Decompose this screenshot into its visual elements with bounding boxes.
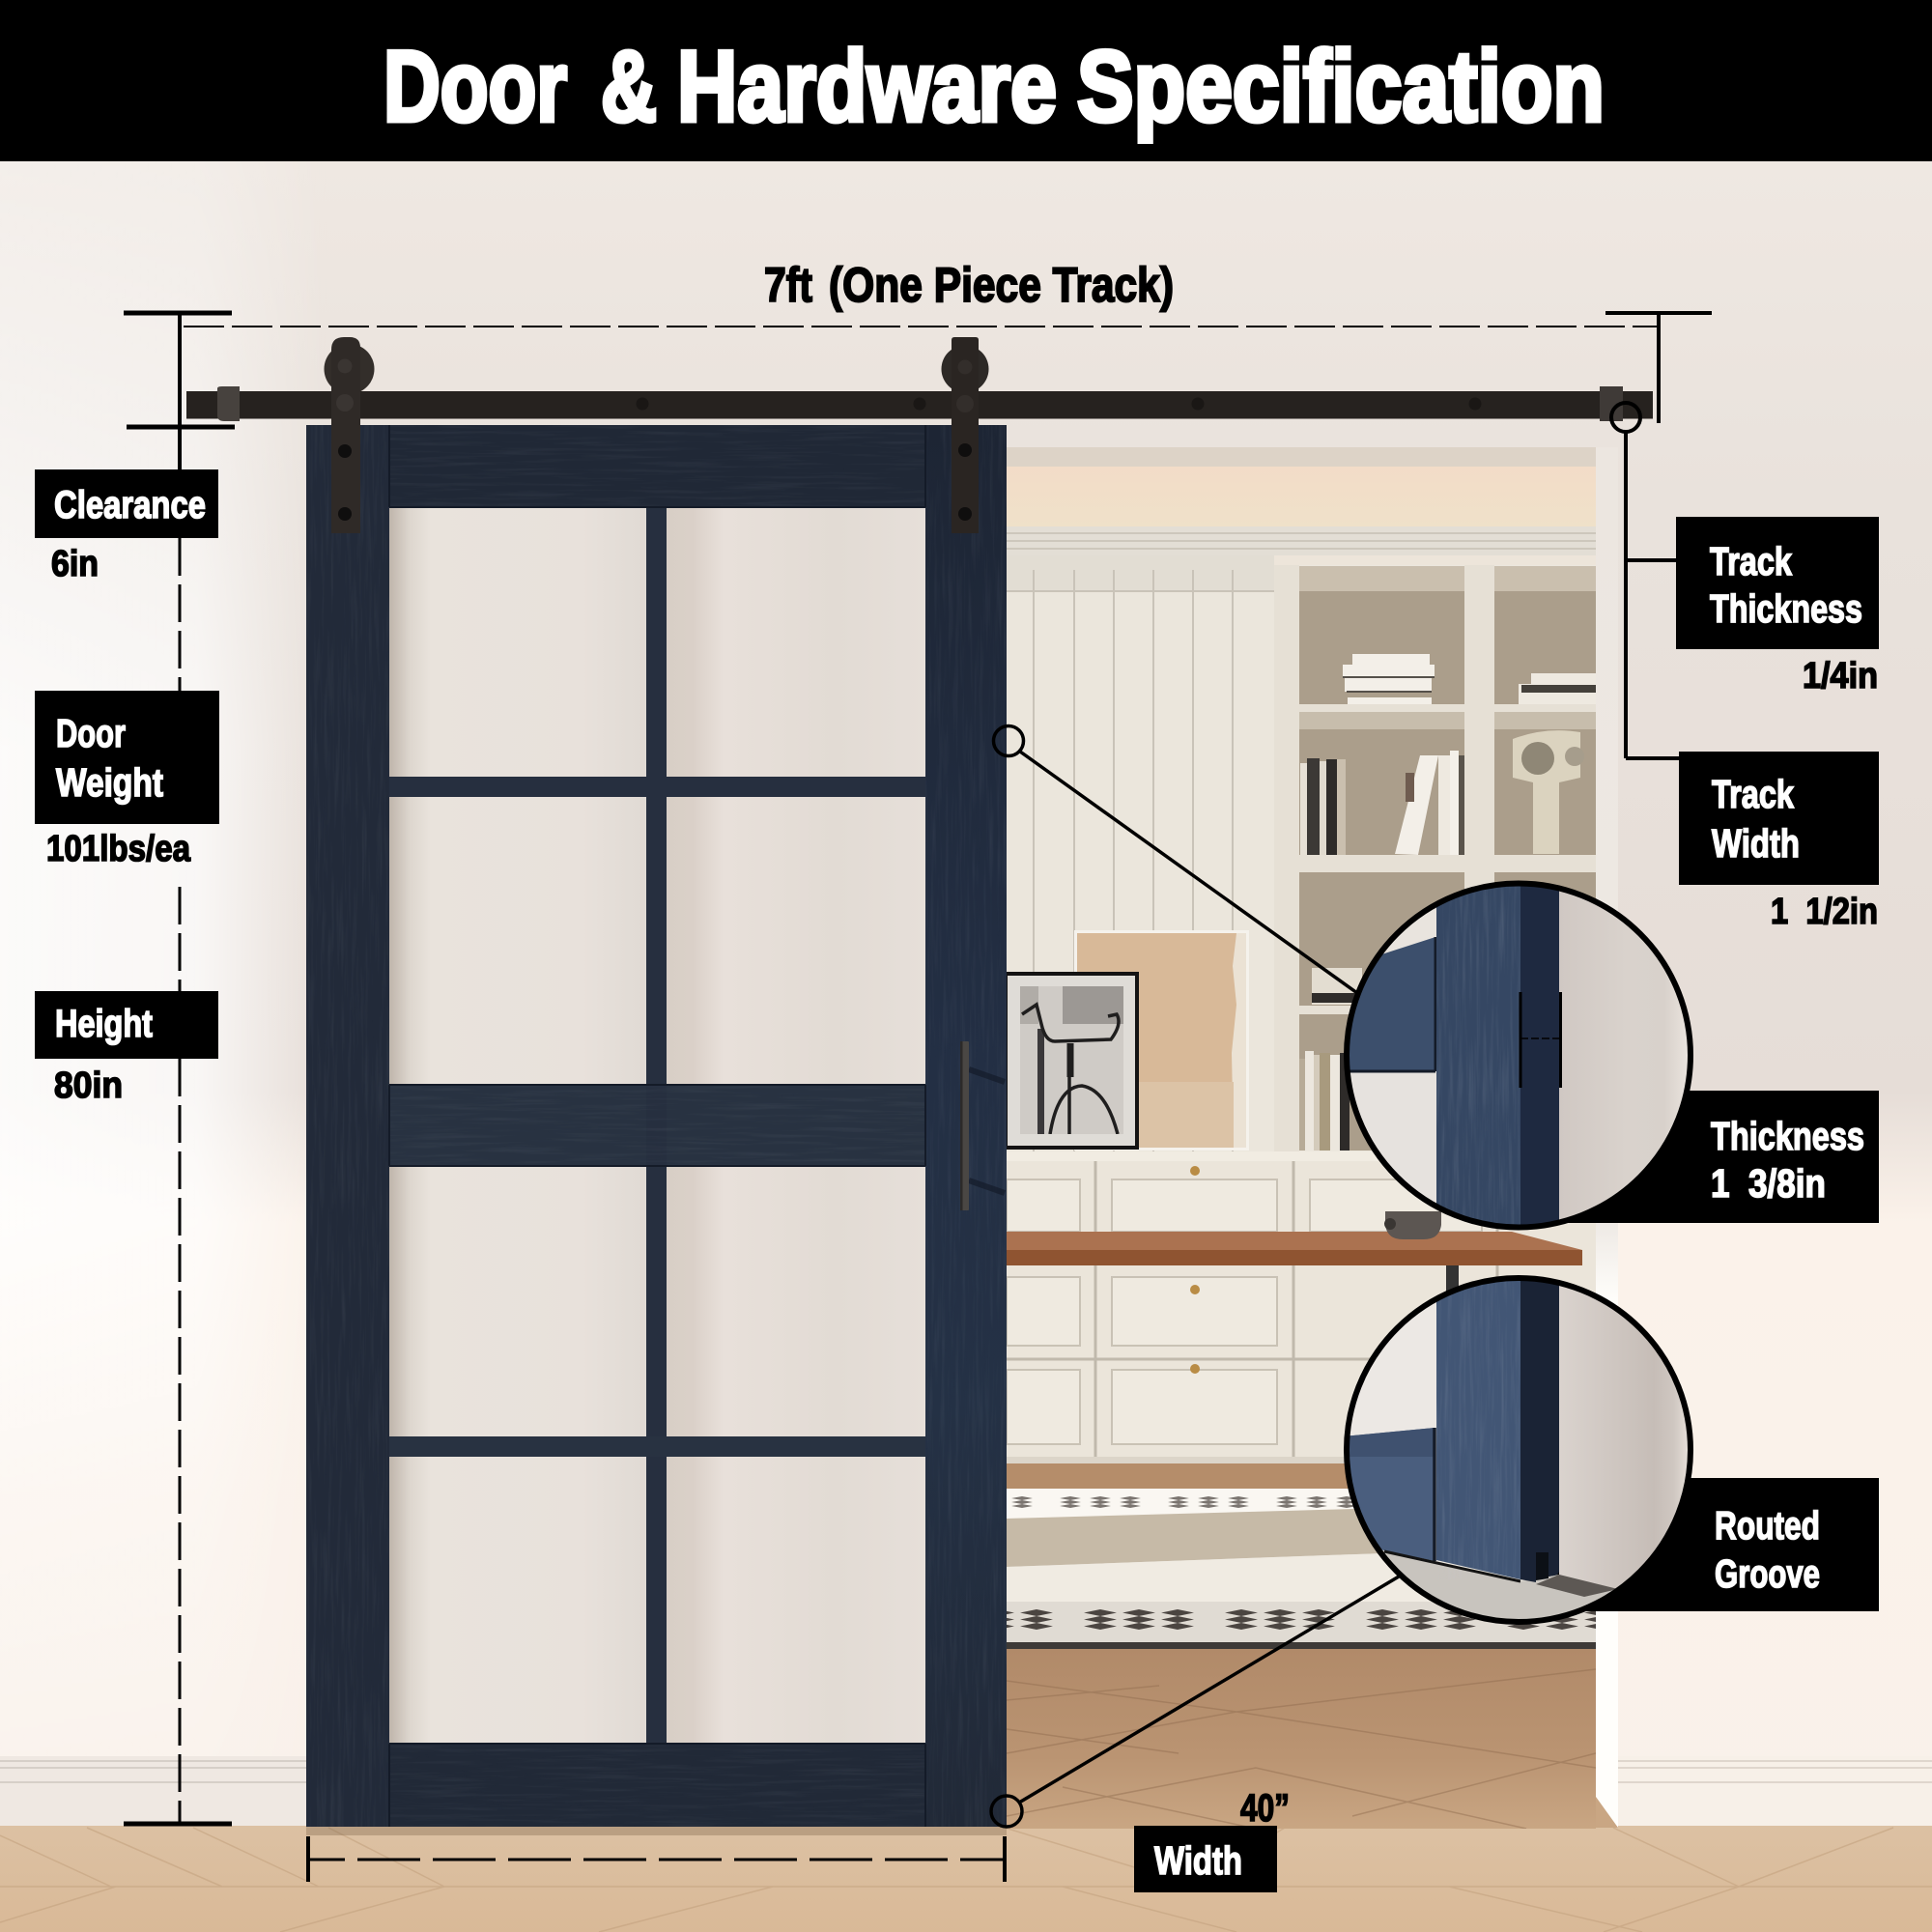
left stop: [217, 386, 240, 421]
thickness marks: [1520, 992, 1561, 1088]
door weight label: 101lbs/ea: [46, 829, 191, 869]
interior room through opening: [1007, 447, 1596, 1829]
interior floor: [1007, 1457, 1596, 1829]
title: &: [601, 31, 657, 143]
track width label: Width: [1712, 821, 1800, 866]
sliding door: [306, 425, 1007, 1827]
framed bicycle photo: [1007, 972, 1139, 1150]
routed groove label: Routed: [1715, 1503, 1820, 1548]
barn door track: [186, 386, 1653, 421]
width label: [1134, 1787, 1290, 1892]
table top: [1007, 1232, 1582, 1296]
door weight label: [35, 691, 219, 869]
rail detail: [1350, 937, 1434, 1070]
door handle: [960, 1041, 1005, 1210]
crown moulding: [1007, 526, 1596, 555]
books on top shelf: [1343, 654, 1596, 704]
baseboard left: [0, 1756, 307, 1826]
clearance label: 6in: [51, 544, 99, 584]
door jamb: [1596, 447, 1618, 1828]
shelves and uprights: [1299, 708, 1596, 855]
zoom circle: door thickness detail: [1343, 879, 1694, 1236]
track length label: (One Piece Track): [829, 258, 1174, 312]
cabinet fronts: [1007, 1151, 1499, 1457]
width label: 40”: [1240, 1787, 1290, 1830]
groove callout leader: [991, 1577, 1399, 1827]
baseboard right: [1618, 1756, 1932, 1826]
track length label: 7ft: [764, 258, 812, 312]
clearance label: [35, 469, 218, 584]
left hanger: [325, 337, 375, 533]
lower books: [1299, 968, 1362, 1151]
zoom circle: routed groove detail: [1343, 1273, 1694, 1627]
clearance label: Clearance: [54, 484, 206, 526]
track thickness label: Track: [1710, 539, 1792, 583]
floor detail: [1383, 1550, 1606, 1619]
wall panelling: [1007, 555, 1274, 1159]
routed groove label: Groove: [1715, 1551, 1820, 1596]
routed groove label: [1546, 1478, 1879, 1611]
sculpture: [1513, 730, 1584, 854]
track width label: [1679, 752, 1879, 932]
door width dimension line: [308, 1836, 1005, 1882]
rug: [1007, 1489, 1596, 1649]
track thickness label: [1676, 517, 1879, 696]
height label: Height: [55, 1003, 153, 1045]
track width label: Track: [1712, 772, 1794, 816]
bookcase: [1274, 565, 1596, 1154]
thickness callout leader: [993, 726, 1357, 993]
track bolts: [636, 398, 1482, 410]
glass panes: [389, 507, 925, 1744]
wood grain: [306, 425, 1007, 1827]
thickness label: 1 3/8in: [1711, 1161, 1826, 1206]
door weight label: Door: [56, 711, 126, 755]
right stop: [1600, 386, 1623, 421]
clearance and height dimension lines: [124, 313, 235, 1824]
ceiling glow: [1007, 467, 1596, 526]
floor: [0, 1826, 1932, 1932]
door weight label: Weight: [56, 760, 163, 805]
thickness label: [1546, 1091, 1879, 1223]
stile detail: [1436, 879, 1520, 1231]
cup: [1384, 1211, 1441, 1239]
stile detail: [1436, 1273, 1520, 1579]
height label: [35, 991, 218, 1106]
thickness label: Thickness: [1711, 1114, 1864, 1158]
title: Specification: [1077, 31, 1605, 143]
soffit: [1007, 447, 1596, 467]
bottom rail detail: [1343, 1428, 1435, 1561]
herringbone floor lines: [1007, 1669, 1596, 1829]
title: [384, 31, 1605, 143]
track callout leader: [1611, 403, 1680, 758]
track width label: 1 1/2in: [1771, 892, 1878, 932]
track thickness label: Thickness: [1710, 586, 1862, 631]
width label: Width: [1154, 1838, 1242, 1883]
art print leaning: [1074, 930, 1249, 1151]
right hanger: [941, 337, 989, 533]
door frame stiles and rails: [306, 425, 1007, 1827]
groove notch: [1536, 1552, 1548, 1580]
books on middle shelf: [1300, 751, 1464, 855]
track thickness label: 1/4in: [1803, 656, 1878, 696]
track length dimension line: [184, 313, 1712, 423]
title: Door: [384, 31, 567, 143]
heading bar: [0, 0, 1932, 161]
title: Hardware: [677, 31, 1057, 143]
height label: 80in: [54, 1065, 123, 1106]
